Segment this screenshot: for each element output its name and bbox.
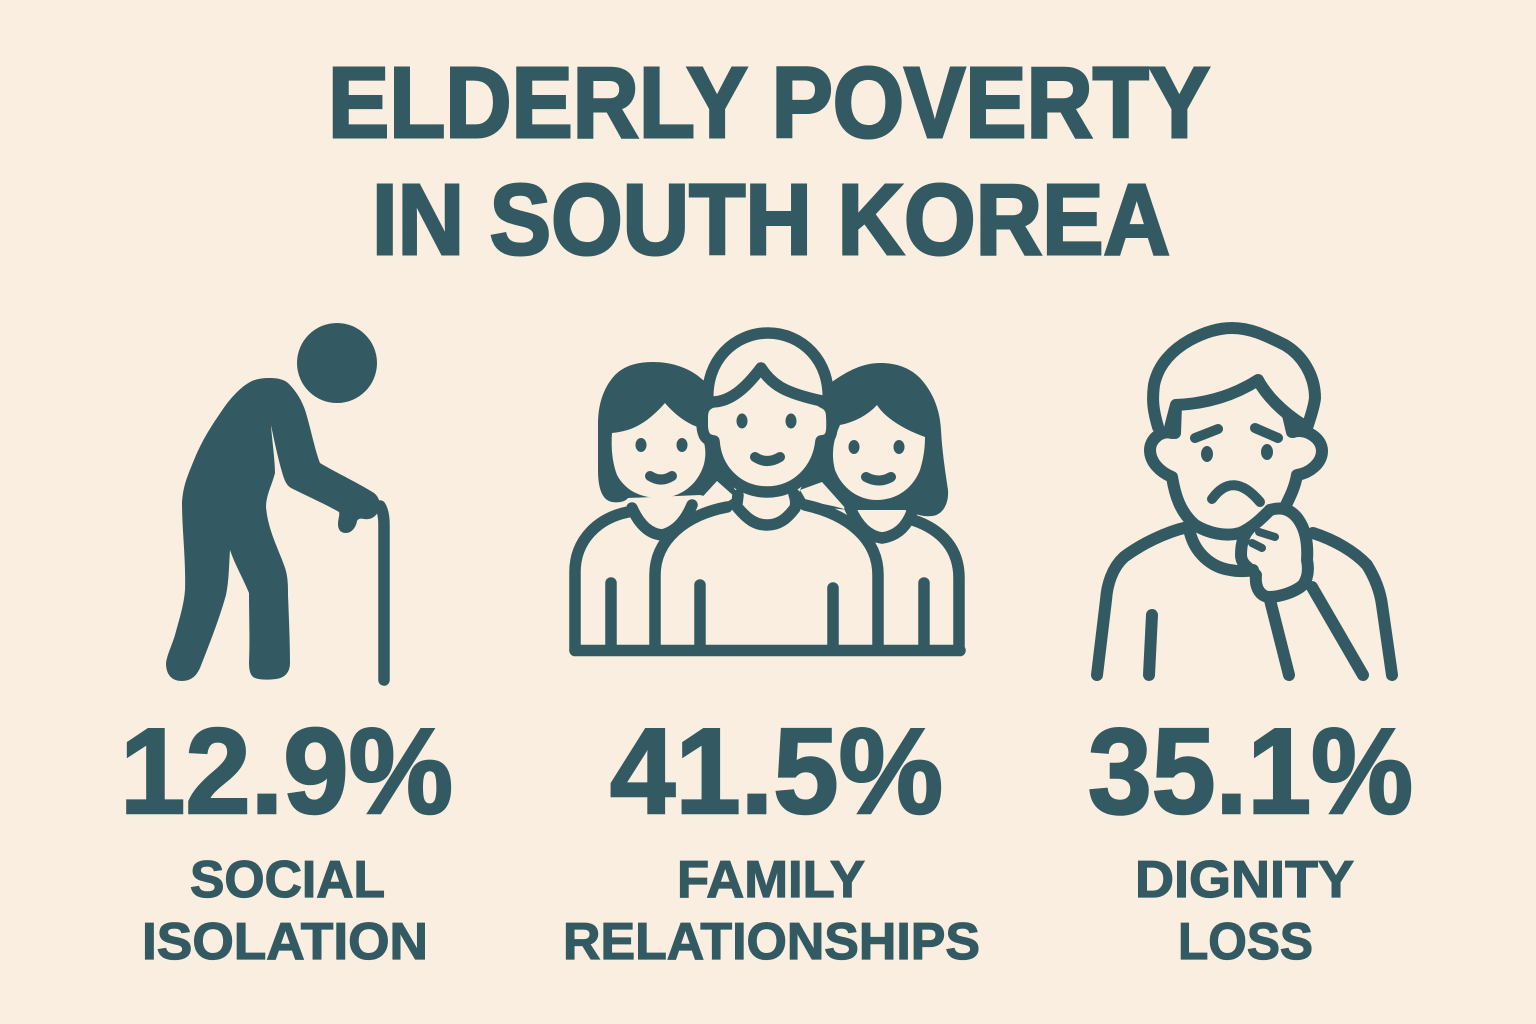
label: family relationships: FAMILY (677, 851, 865, 909)
label: social isolation: ISOLATION (142, 913, 428, 971)
icon: elderly person with cane (166, 323, 384, 681)
label: dignity loss (1135, 851, 1354, 971)
right person (795, 363, 959, 650)
panel: social isolation (120, 323, 453, 971)
icon: sad man touching neck (1097, 328, 1392, 675)
panel: dignity loss (1088, 328, 1413, 971)
base line (575, 645, 960, 656)
label: family relationships: RELATIONSHIPS (563, 913, 980, 971)
icon: three people group (575, 333, 960, 650)
title: ELDERLY POVERTY (328, 47, 1210, 159)
title: IN SOUTH KOREA (372, 164, 1170, 276)
statistic: 35.1%: 35.1% (1088, 703, 1413, 839)
statistic: 41.5%: 41.5% (610, 703, 943, 839)
title (328, 47, 1210, 276)
center person (655, 333, 878, 650)
label: social isolation (142, 851, 428, 971)
left person (575, 362, 740, 650)
statistic: 12.9%: 12.9% (120, 703, 453, 839)
label: dignity loss: DIGNITY (1135, 851, 1354, 909)
label: dignity loss: LOSS (1178, 913, 1313, 971)
panel: family relationships (563, 333, 980, 971)
label: family relationships (563, 851, 980, 971)
label: social isolation: SOCIAL (190, 851, 385, 909)
